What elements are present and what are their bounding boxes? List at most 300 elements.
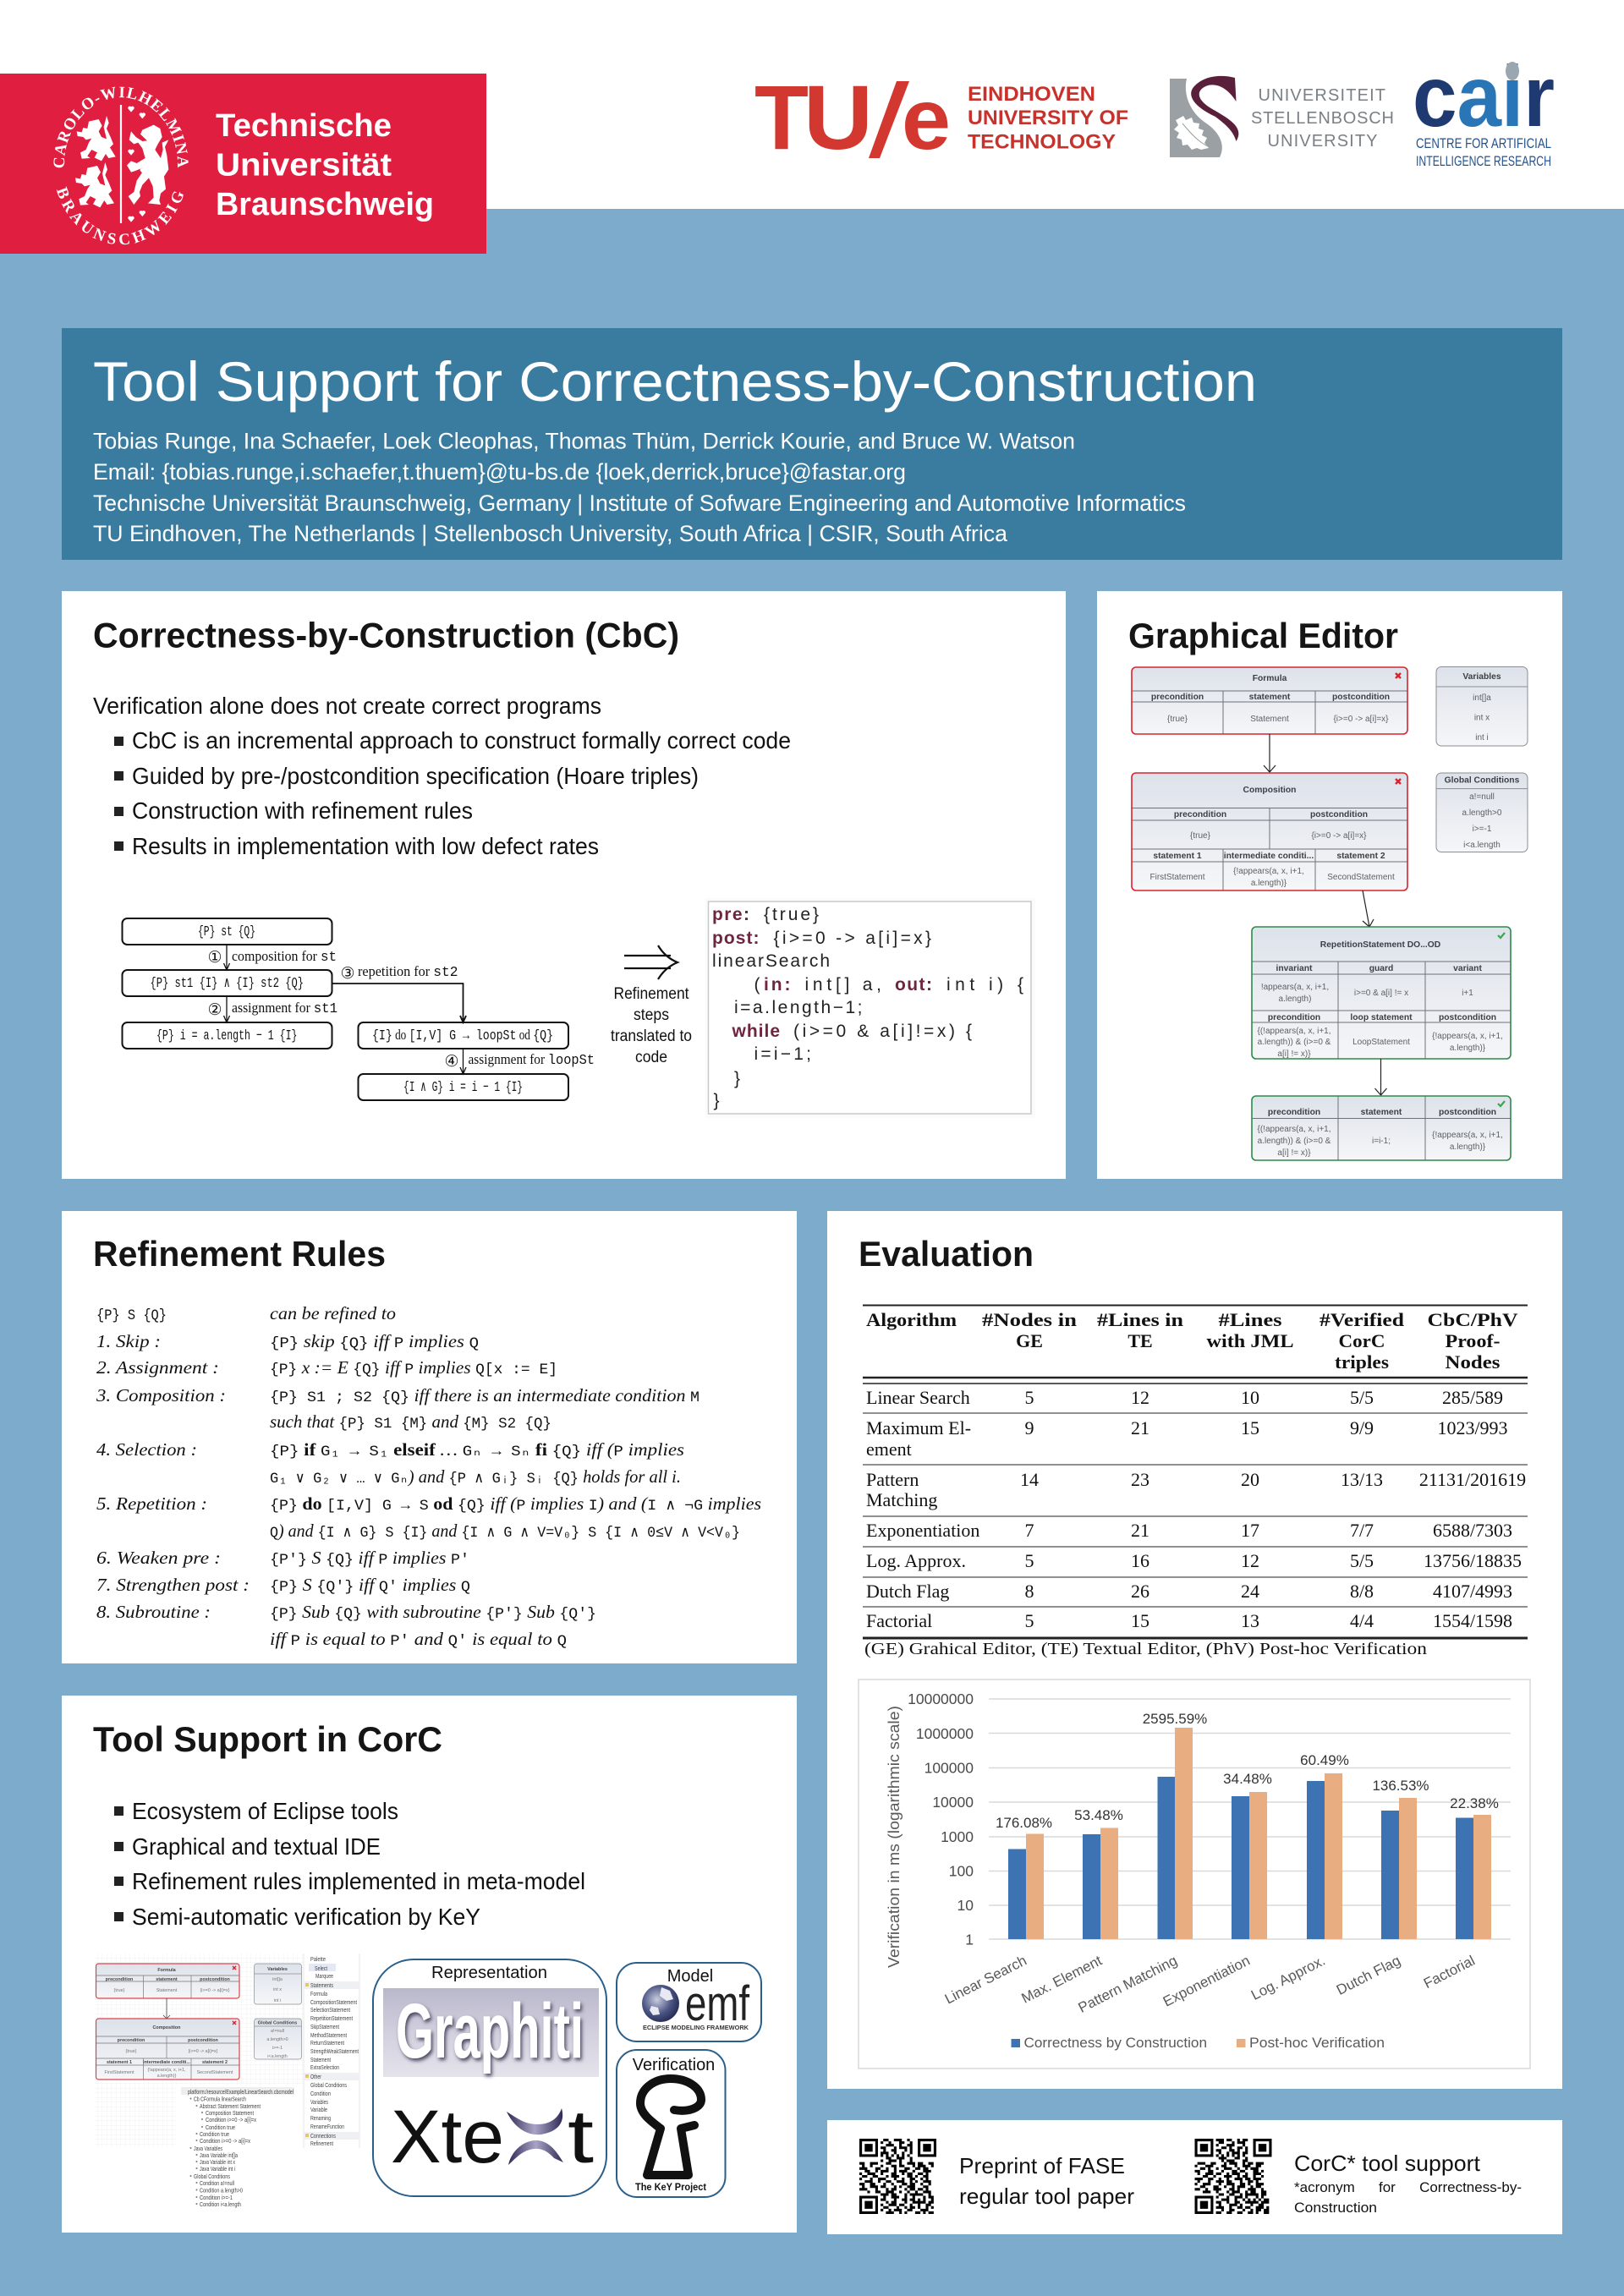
- table rows: 20: [1241, 1469, 1259, 1490]
- heading: Tool Support in CorC: [93, 1719, 442, 1759]
- logo: KeY keyhole: The KeY Project: [635, 2183, 706, 2193]
- logo: Stellenbosch University: [1170, 76, 1394, 157]
- panel: Correctness-by-Construction: [62, 591, 1066, 1179]
- bar chart: verification time: [859, 1680, 1530, 2069]
- editor block: Formula: {true}: [1167, 715, 1188, 724]
- outline tree: Composition Statement: [206, 2109, 255, 2117]
- rule definitions: {P} x := E {Q} iff P implies Q[x := E]: [270, 1357, 557, 1378]
- code listing: }: [734, 1069, 740, 1088]
- y axis labels: 10000: [932, 1794, 974, 1811]
- palette: [304, 1954, 359, 2148]
- arrow: [163, 1998, 170, 2019]
- table rows: 5/5: [1350, 1550, 1374, 1571]
- table rows: 15: [1241, 1417, 1259, 1438]
- refinement tree diagram: assignment for st1: [232, 1000, 337, 1017]
- bullet list: Refinement rules implemented in meta-model: [132, 1868, 585, 1894]
- table header: #Lines in: [1097, 1309, 1183, 1330]
- editor block: Global Conditions: [1436, 773, 1528, 852]
- table rows: 5/5: [1350, 1387, 1374, 1408]
- editor block: Repetition: i+1: [1462, 989, 1473, 998]
- table rows: Matching: [866, 1489, 937, 1510]
- table header: Nodes: [1445, 1351, 1501, 1373]
- bullet list: [114, 1798, 585, 1930]
- bullet list: CbC is an incremental approach to construct formally correct code: [132, 727, 791, 753]
- outline tree: Condition true: [206, 2123, 235, 2131]
- mini block: Composition: precondition: [118, 2038, 145, 2043]
- mini block: Formula: Formula: [157, 1968, 177, 1973]
- table rows: 23: [1131, 1469, 1149, 1490]
- outline tree: Java Variables: [194, 2145, 222, 2152]
- refinement tree diagram: ④: [444, 1052, 459, 1071]
- code listing: out:: [895, 975, 932, 995]
- logo: TU/e Eindhoven: e: [902, 71, 951, 167]
- palette: SkipStatement: [310, 2023, 340, 2030]
- editor block: Variables: [1436, 666, 1528, 746]
- percent labels: 136.53%: [1372, 1778, 1429, 1794]
- table header: CorC: [1338, 1330, 1385, 1351]
- mini block: Formula: Statement: [156, 1988, 178, 1993]
- editor block: Composition: {i>=0 -> a[i]=x}: [1311, 831, 1367, 841]
- palette: MethodStatement: [310, 2031, 348, 2039]
- table rows: 26: [1131, 1581, 1149, 1602]
- caption: CorC tool support: [1294, 2151, 1522, 2216]
- caption: preprint: [959, 2153, 1134, 2209]
- outline tree: Java Variable int x: [200, 2158, 235, 2166]
- x axis labels: Max. Element: [1019, 1953, 1105, 2007]
- rule names: 1. Skip :: [96, 1331, 161, 1351]
- logo: KeY keyhole: [635, 2079, 706, 2193]
- table rows: 1023/993: [1437, 1417, 1508, 1438]
- table rows: 285/589: [1442, 1387, 1503, 1408]
- palette: Statements: [310, 1981, 333, 1989]
- caption: CorC tool support: *acronym: [1294, 2179, 1355, 2195]
- editor block: Skip statement: {!appears(a, x, i+1,: [1432, 1131, 1503, 1140]
- refinement tree diagram: repetition for st2: [358, 963, 458, 981]
- editor block: Composition: FirstStatement: [1149, 873, 1205, 882]
- mini block: Variables: int i: [274, 1998, 281, 2003]
- caption: refinement steps translated to code: steps: [634, 1006, 669, 1024]
- rule names: [96, 1307, 250, 1622]
- bullet list: Ecosystem of Eclipse tools: [132, 1798, 398, 1824]
- outline tree: platform:/resource/Example/LinearSearch.cbcmodel: [188, 2088, 294, 2096]
- y axis labels: [908, 1690, 974, 1948]
- logo: Graphiti: Graphiti: [396, 1988, 584, 2074]
- table rows: 21: [1131, 1520, 1149, 1541]
- editor block: Repetition: postcondition: [1439, 1013, 1496, 1022]
- mini block: Global Conditions: a.length>0: [266, 2037, 288, 2042]
- palette: Select: [315, 1964, 328, 1972]
- table rows: 7: [1025, 1520, 1034, 1541]
- title banner: [62, 328, 1562, 560]
- mini block: Formula: postcondition: [200, 1977, 230, 1982]
- table rows: Dutch Flag: [866, 1581, 949, 1602]
- rule definitions: such that {P} S1 {M} and {M} S2 {Q}: [270, 1411, 551, 1433]
- editor block: Global Conditions: a!=null: [1469, 792, 1495, 802]
- mini block: Variables: Variables: [267, 1967, 288, 1972]
- editor block: Repetition: a.length)) & (i>=0 &: [1258, 1038, 1331, 1047]
- refinement tree diagram: {P} st1 {I} ∧ {I} st2 {Q}: [151, 976, 304, 992]
- editor block: Repetition: [1252, 927, 1511, 1059]
- y axis labels: 1000000: [916, 1725, 974, 1742]
- mini block: Global Conditions: i<a.length: [267, 2054, 288, 2059]
- palette: RepetitionStatement: [310, 2014, 354, 2022]
- mini block: Composition: Composition: [153, 2025, 180, 2030]
- table header: Algorithm: [866, 1309, 957, 1330]
- logo: Xtext: [391, 2094, 594, 2178]
- code listing: i=i−1;: [754, 1044, 811, 1064]
- editor block: Repetition: precondition: [1268, 1013, 1320, 1022]
- y axis labels: 10: [957, 1897, 974, 1914]
- mini block: Variables: int x: [273, 1987, 282, 1992]
- table rows: 21131/201619: [1419, 1469, 1526, 1490]
- mini block: Composition: {i>=0 -> a[i]=x}: [188, 2049, 218, 2054]
- mini block: Composition: {!appears(a, x, i+1,: [147, 2068, 186, 2073]
- card: Verification: [617, 2050, 726, 2197]
- table header: #Verified: [1320, 1309, 1404, 1330]
- editor block: Repetition: a.length): [1279, 995, 1311, 1004]
- mini block: Composition: [96, 2019, 239, 2080]
- caption: preprint: Preprint of FASE: [959, 2153, 1125, 2178]
- legend: Post-hoc Verification: [1249, 2035, 1385, 2051]
- wordmark: [216, 108, 434, 222]
- logo: Stellenbosch University: STELLENBOSCH: [1251, 109, 1394, 128]
- rule definitions: Q) and {I ∧ G} S {I} and {I ∧ G ∧ V=V₀} S {I ∧ 0≤V ∧ V<V₀}: [270, 1521, 740, 1542]
- palette: SelectionStatement: [310, 2006, 351, 2014]
- editor block: Repetition: {(!appears(a, x, i+1,: [1257, 1027, 1331, 1036]
- palette: Variables: [310, 2098, 328, 2106]
- code listing: i=a.length−1;: [734, 998, 863, 1017]
- table rows: Pattern: [866, 1469, 919, 1490]
- outline tree: Abstract Statement Statement: [200, 2102, 261, 2110]
- rule names: {P} S {Q}: [96, 1307, 167, 1324]
- outline tree: Java Variable int i: [200, 2165, 235, 2173]
- mini block: Formula: statement: [156, 1977, 178, 1982]
- palette: Connections: [310, 2132, 336, 2140]
- refinement tree diagram: composition for st: [232, 948, 337, 966]
- x axis labels: Dutch Flag: [1334, 1953, 1403, 1998]
- logo: Graphiti: [383, 1988, 599, 2077]
- x axis labels: Pattern Matching: [1076, 1953, 1180, 2016]
- QR code: CorC tool: [1194, 2139, 1272, 2214]
- rule names: 6. Weaken pre :: [96, 1548, 221, 1568]
- palette: Variable: [310, 2106, 327, 2113]
- mini block: Formula: precondition: [106, 1977, 133, 1982]
- panel: Graphical Editor: [1097, 591, 1562, 1179]
- bullet list: Guided by pre-/postcondition specification (Hoare triples): [132, 763, 699, 789]
- table rows: Linear Search: [866, 1387, 970, 1408]
- percent labels: 53.48%: [1074, 1807, 1123, 1823]
- editor block: Composition: intermediate conditi...: [1224, 852, 1314, 861]
- palette: Refinement: [310, 2140, 334, 2147]
- palette: CompositionStatement: [310, 1998, 358, 2006]
- outline tree: [181, 2087, 294, 2208]
- mini block: Composition: intermediate conditi...: [143, 2060, 190, 2065]
- panel: Evaluation: [827, 1211, 1562, 2089]
- mini block: Formula: {true}: [114, 1988, 125, 1993]
- editor block: Repetition: {!appears(a, x, i+1,: [1432, 1032, 1503, 1041]
- bullet list: Semi-automatic verification by KeY: [132, 1904, 480, 1930]
- table rows: 6588/7303: [1433, 1520, 1512, 1541]
- refinement tree diagram: ②: [207, 1000, 222, 1019]
- logo: CAIR: cair: [1413, 48, 1555, 145]
- code listing: [705, 898, 1035, 1118]
- editor block: Skip statement: i=i-1;: [1372, 1137, 1391, 1146]
- title: Tool Support for Correctness-by-Construction: [93, 350, 1257, 413]
- rule names: 3. Composition :: [96, 1385, 226, 1406]
- table rows: 21: [1131, 1417, 1149, 1438]
- card: Verification: Verification: [633, 2056, 715, 2074]
- results table: [863, 1306, 1528, 1638]
- rule definitions: {P} S {Q′} iff Q′ implies Q: [270, 1575, 470, 1596]
- palette: ExtraSelection: [310, 2063, 339, 2071]
- code listing: (i>=0 & a[i]!=x) {: [793, 1022, 972, 1041]
- x axis labels: Log. Approx.: [1248, 1953, 1328, 2003]
- palette: RenameFunction: [310, 2123, 344, 2130]
- authors and affiliations: [93, 428, 1186, 546]
- arrow: [1375, 1059, 1387, 1095]
- mini block: Global Conditions: [254, 2019, 301, 2059]
- editor block: Global Conditions: a.length>0: [1462, 808, 1502, 818]
- editor block: Skip statement: postcondition: [1439, 1108, 1496, 1117]
- caption: CorC tool support: for: [1379, 2179, 1396, 2195]
- editor block: Composition: {true}: [1190, 831, 1211, 841]
- table header: [866, 1309, 1518, 1373]
- editor block: Repetition: guard: [1369, 964, 1393, 973]
- arrow: [1363, 890, 1374, 927]
- mini block: Formula: [96, 1964, 239, 1998]
- bullet list: Results in implementation with low defect rates: [132, 833, 599, 859]
- table rows: [866, 1387, 1526, 1631]
- mini block: Composition: {true}: [126, 2049, 137, 2054]
- seal: BRAUNSCHWEIG: [56, 186, 184, 245]
- mini block: Composition: SecondStatement: [197, 2070, 233, 2075]
- logo: Xtext: t: [568, 2094, 594, 2178]
- editor block: Formula: precondition: [1151, 693, 1204, 702]
- rule definitions: {P} if G₁ → S₁ elseif … Gₙ → Sₙ fi {Q} iff (P implies: [270, 1439, 684, 1460]
- percent labels: 34.48%: [1223, 1771, 1272, 1787]
- wordmark: Technische: [216, 108, 392, 144]
- panel: QR links: [827, 2120, 1562, 2234]
- refinement tree diagram: ③: [340, 964, 355, 983]
- table rows: 8/8: [1350, 1581, 1374, 1602]
- rule names: 4. Selection :: [96, 1439, 197, 1460]
- mini block: Composition: statement 1: [107, 2060, 132, 2065]
- QR code: preprint: [859, 2139, 936, 2214]
- mini block: Global Conditions: a!=null: [271, 2029, 284, 2034]
- editor block: Global Conditions: Global Conditions: [1445, 776, 1520, 785]
- table rows: 8: [1025, 1581, 1034, 1602]
- rule names: 7. Strengthen post :: [96, 1575, 250, 1595]
- editor block: Formula: statement: [1249, 693, 1291, 702]
- table rows: 12: [1131, 1387, 1149, 1408]
- logo: TU/e Eindhoven: [754, 66, 1128, 168]
- card: Model: Model: [667, 1967, 713, 1986]
- caption: refinement steps translated to code: code: [635, 1049, 667, 1066]
- bars: Post-hoc Verification: [1026, 1728, 1491, 1939]
- code listing: int[] a,: [805, 975, 881, 995]
- logo: EMF: [642, 1976, 750, 2031]
- table rows: 5: [1025, 1550, 1034, 1571]
- table rows: 24: [1241, 1581, 1259, 1602]
- logo: EMF: ECLIPSE MODELING FRAMEWORK: [643, 2025, 749, 2031]
- editor block: Global Conditions: i<a.length: [1463, 841, 1501, 850]
- table footnote: (GE) Grahical Editor, (TE) Textual Editor, (PhV) Post-hoc Verification: [864, 1640, 1427, 1658]
- screenshot: editor with palette and outline: [95, 1954, 359, 2208]
- editor block: Variables: int[]a: [1473, 693, 1491, 703]
- authors and affiliations: Tobias Runge, Ina Schaefer, Loek Cleophas, Thomas Thüm, Derrick Kourie, and Bruce W. Watson: [93, 428, 1075, 453]
- table rows: 13/13: [1341, 1469, 1383, 1490]
- caption: refinement steps translated to code: [611, 985, 692, 1066]
- palette: Other: [310, 2073, 321, 2080]
- editor block: Composition: SecondStatement: [1327, 873, 1395, 882]
- refinement tree diagram: {P} st {Q}: [198, 924, 255, 940]
- palette: ReturnStatement: [310, 2039, 345, 2047]
- mini block: Global Conditions: Global Conditions: [258, 2021, 297, 2026]
- mini block: Composition: a.length)}: [157, 2074, 177, 2079]
- editor block: Skip statement: statement: [1361, 1108, 1402, 1117]
- table rows: 14: [1020, 1469, 1039, 1490]
- editor block: Formula: [1132, 667, 1407, 734]
- table rows: 13: [1241, 1610, 1259, 1631]
- outline tree: Cb CFormula linearSearch: [194, 2096, 246, 2102]
- editor block: Composition: {!appears(a, x, i+1,: [1233, 867, 1304, 876]
- y axis labels: 100000: [924, 1759, 974, 1776]
- editor block: Formula: Formula: [1253, 674, 1287, 683]
- authors and affiliations: Email: {tobias.runge,i.schaefer,t.thuem}@tu-bs.de {loek,derrick,bruce}@fastar.org: [93, 459, 906, 485]
- editor block: Skip statement: {(!appears(a, x, i+1,: [1257, 1125, 1331, 1134]
- mini block: Variables: [254, 1964, 301, 2004]
- palette: Renaming: [310, 2114, 331, 2122]
- authors and affiliations: TU Eindhoven, The Netherlands | Stellenbosch University, South Africa | CSIR, South Africa: [93, 521, 1008, 546]
- bars: Correctness by Construction: [1008, 1777, 1473, 1939]
- table rows: 5: [1025, 1387, 1034, 1408]
- heading: Graphical Editor: [1128, 616, 1398, 655]
- mini block: Variables: int[]a: [272, 1977, 283, 1982]
- table header: triples: [1335, 1351, 1389, 1373]
- bullet list: [114, 727, 791, 859]
- logo: Stellenbosch University: UNIVERSITY: [1267, 132, 1377, 151]
- bullet list: Construction with refinement rules: [132, 797, 473, 824]
- code listing: }: [714, 1091, 720, 1110]
- table rows: Factorial: [866, 1610, 932, 1631]
- editor block: Repetition: variant: [1453, 964, 1482, 973]
- editor block: Skip statement: a.length)) & (i>=0 &: [1258, 1137, 1331, 1146]
- table rows: 7/7: [1350, 1520, 1374, 1541]
- table header: GE: [1016, 1330, 1043, 1351]
- table rows: 10: [1241, 1387, 1259, 1408]
- logo: TU/e Eindhoven: TECHNOLOGY: [968, 130, 1116, 154]
- rule definitions: {P′} S {Q} iff P implies P′: [270, 1548, 469, 1569]
- table rows: Log. Approx.: [866, 1550, 966, 1571]
- outline tree: Condition i>=0 -> a[i]=x: [206, 2116, 256, 2123]
- code listing: (: [754, 975, 760, 995]
- heading: Evaluation: [859, 1234, 1034, 1274]
- editor block: Variables: int x: [1474, 714, 1490, 722]
- mini block: Formula: {i>=0 -> a[i]=x}: [200, 1988, 230, 1993]
- mini block: Composition: statement 2: [202, 2060, 228, 2065]
- editor block: Repetition: i>=0 & a[i] != x: [1354, 989, 1408, 998]
- editor block: Composition: a.length)}: [1251, 879, 1287, 888]
- heading: Correctness-by-Construction (CbC): [93, 616, 679, 655]
- mini block: Composition: FirstStatement: [104, 2070, 134, 2075]
- arrow: implies: [624, 945, 678, 979]
- table header: Proof-: [1445, 1330, 1501, 1351]
- caption: refinement steps translated to code: Refinement: [614, 985, 689, 1003]
- percent labels: 2595.59%: [1143, 1711, 1207, 1727]
- code listing: in:: [764, 975, 790, 995]
- logo: CAIR: INTELLIGENCE RESEARCH: [1416, 154, 1551, 169]
- y axis labels: 1: [965, 1932, 974, 1948]
- code listing: int i) {: [946, 975, 1023, 995]
- code listing: {i>=0 -> a[i]=x}: [773, 929, 931, 948]
- table rows: 9/9: [1350, 1417, 1374, 1438]
- code listing: {true}: [764, 905, 819, 924]
- outline tree: Java Variable int[]a: [200, 2151, 239, 2159]
- table rows: Exponentiation: [866, 1520, 979, 1541]
- caption: preprint: regular tool paper: [959, 2184, 1134, 2209]
- refinement tree diagram: {I ∧ G} i = i − 1 {I}: [403, 1080, 523, 1096]
- table rows: Maximum El-: [866, 1417, 971, 1438]
- outline tree: Condition true: [200, 2130, 229, 2138]
- palette: Statement: [310, 2056, 332, 2063]
- legend: [1012, 2035, 1385, 2051]
- logo: CAIR: CENTRE FOR ARTIFICIAL: [1416, 136, 1551, 151]
- rule names: 2. Assignment :: [96, 1357, 219, 1378]
- percent labels: 176.08%: [996, 1815, 1052, 1831]
- logo: Stellenbosch University: UNIVERSITEIT: [1259, 86, 1385, 105]
- card: Representation: Representation: [431, 1964, 547, 1982]
- table rows: 16: [1131, 1550, 1149, 1571]
- panel: Refinement Rules: [62, 1211, 797, 1663]
- legend: Correctness by Construction: [1023, 2035, 1207, 2051]
- wordmark: Braunschweig: [216, 187, 434, 222]
- table rows: 17: [1241, 1520, 1259, 1541]
- y axis labels: 10000000: [908, 1690, 974, 1707]
- seal: CAROLO-WILHELMINA: [53, 86, 189, 167]
- table rows: 12: [1241, 1550, 1259, 1571]
- bullet list: Graphical and textual IDE: [132, 1833, 381, 1860]
- rule definitions: [270, 1303, 761, 1650]
- card: Representation: [373, 1959, 606, 2196]
- logo: EMF: emf: [685, 1976, 750, 2031]
- editor block: Variables: Variables: [1462, 672, 1501, 682]
- mini block: Global Conditions: i>=-1: [272, 2046, 283, 2051]
- table header: with JML: [1206, 1330, 1294, 1351]
- rule definitions: {P} S1 ; S2 {Q} iff there is an intermediate condition M: [270, 1385, 700, 1406]
- table rows: ement: [866, 1438, 912, 1460]
- x axis labels: Linear Search: [942, 1953, 1029, 2008]
- editor block: Repetition: a[i] != x)}: [1277, 1049, 1311, 1059]
- arrow: [1264, 734, 1276, 772]
- x axis labels: Exponentiation: [1160, 1953, 1253, 2010]
- palette: Global Conditions: [310, 2081, 347, 2089]
- editor block: Skip statement: [1252, 1096, 1511, 1160]
- y axis labels: 1000: [941, 1828, 974, 1845]
- refinement tree diagram: {P} i = a.length − 1 {I}: [156, 1028, 298, 1044]
- table rows: 9: [1025, 1417, 1034, 1438]
- table header: #Lines: [1218, 1309, 1282, 1330]
- rule definitions: G₁ ∨ G₂ ∨ … ∨ Gₙ) and {P ∧ Gᵢ} Sᵢ {Q} holds for all i.: [270, 1466, 681, 1488]
- wordmark: Universität: [216, 147, 392, 183]
- seal: [53, 86, 189, 245]
- logo: TU/e Eindhoven: UNIVERSITY OF: [968, 107, 1128, 129]
- editor block: Global Conditions: i>=-1: [1473, 825, 1492, 834]
- outline tree: Condition a.length>0: [200, 2187, 243, 2194]
- refinement tree diagram: {I} do [I,V] G → loopSt od {Q}: [372, 1027, 553, 1044]
- editor block: Repetition: a.length)}: [1450, 1044, 1486, 1053]
- editor block: Repetition: LoopStatement: [1352, 1038, 1410, 1047]
- rule definitions: {P} Sub {Q} with subroutine {P′} Sub {Q′}: [270, 1602, 596, 1623]
